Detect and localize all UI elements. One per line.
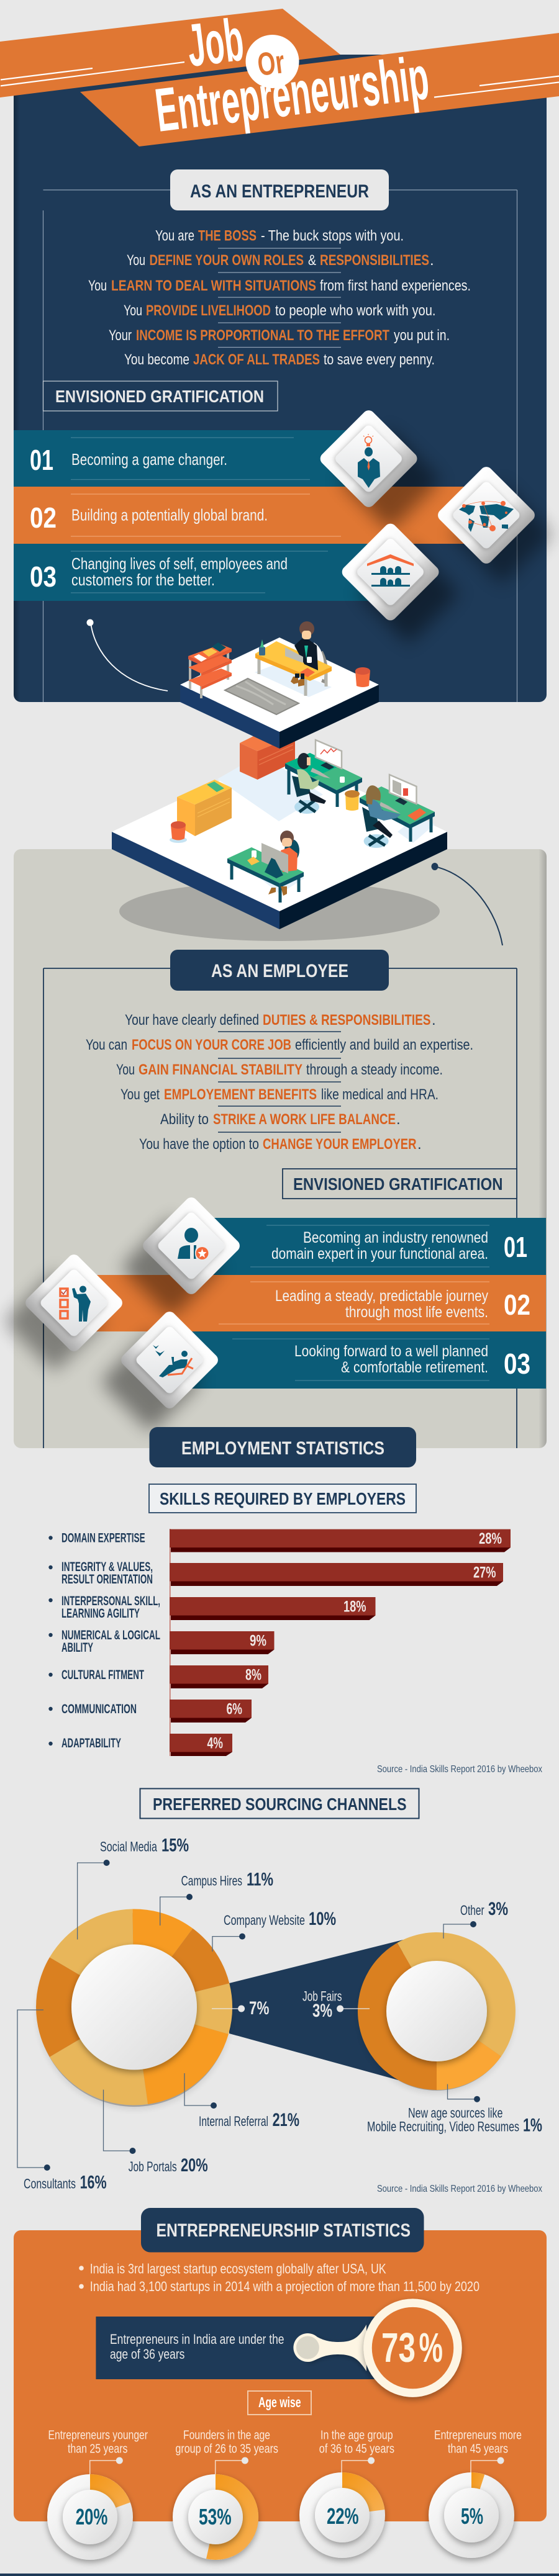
label: social media 15%: 15% <box>161 1835 189 1856</box>
label: campus hires 11%: Campus Hires <box>181 1873 242 1888</box>
label: 26 to 35: group of 26 to 35 years <box>175 2442 278 2456</box>
title banner <box>0 6 559 146</box>
text block: employee traits: . <box>432 1012 436 1029</box>
bar: domain expertise 28% <box>170 1529 511 1552</box>
text block: employee traits: GAIN FINANCIAL STABILITY <box>139 1061 302 1078</box>
label: 7%: 7% <box>249 1998 269 2019</box>
text block: employee traits: . <box>417 1136 422 1153</box>
band 01: domain expert <box>199 1218 546 1275</box>
heading: as an employee: AS AN EMPLOYEE <box>211 961 348 981</box>
text block: entrepreneur traits: you put in. <box>394 327 450 344</box>
band 03: changing lives: 03 <box>30 561 57 593</box>
band 03: retirement <box>180 1331 546 1389</box>
text block: employee traits: STRIKE A WORK LIFE BALANCE <box>213 1111 396 1128</box>
band 02: steady journey: 02 <box>504 1289 530 1321</box>
band 01: game changer <box>14 430 349 487</box>
subheading: PREFERRED SOURCING CHANNELS <box>153 1795 406 1814</box>
legend labels <box>48 1531 160 1750</box>
title badge: Or <box>246 35 299 88</box>
label: other 3%: Other <box>460 1903 484 1918</box>
subheading: envisioned gratification: ENVISIONED GRATIFICATION <box>293 1174 503 1194</box>
rug <box>225 678 299 714</box>
panel: as an employee <box>4 849 547 1448</box>
bar: adaptability 4% <box>170 1734 232 1756</box>
bar: communication 6%: 6% <box>226 1701 242 1718</box>
subheading <box>140 1789 419 1819</box>
panel: entrepreneurship statistics <box>14 2208 547 2560</box>
heading: employment statistics <box>149 1427 416 1467</box>
legend labels: COMMUNICATION <box>61 1702 137 1716</box>
band 01: game changer: Becoming a game changer. <box>71 450 227 469</box>
label: job fairs 3% <box>302 1989 370 2021</box>
text block: entrepreneur traits: INCOME IS PROPORTIONAL TO THE EFFORT <box>136 327 389 344</box>
bar: cultural 8%: 8% <box>245 1666 261 1683</box>
bar: domain expertise 28%: 28% <box>479 1530 502 1547</box>
bar: integrity 27% <box>170 1563 503 1586</box>
subheading: age wise <box>248 2391 311 2415</box>
text block: entrepreneur traits: PROVIDE LIVELIHOOD <box>146 302 271 319</box>
label: 7% <box>212 1998 269 2019</box>
donut: 20 percent: 20% <box>76 2504 107 2529</box>
label: campus hires 11%: 11% <box>247 1870 273 1889</box>
title badge: Or: Or <box>255 44 286 83</box>
text block: entrepreneur traits: - The buck stops with you. <box>261 227 404 245</box>
donut: 5 percent: 5% <box>461 2503 483 2529</box>
text block: employee traits: EMPLOYEMENT BENEFITS <box>164 1086 317 1103</box>
donut: 53 percent <box>173 2457 258 2560</box>
label: job portals 20%: Job Portals <box>129 2159 177 2174</box>
label: other 3%: 3% <box>488 1899 508 1919</box>
bar: communication 6% <box>170 1700 252 1723</box>
band 03: retirement: Looking forward to a well planned <box>294 1343 488 1360</box>
label: consultants 16% <box>24 2173 107 2192</box>
label: company website 10%: 10% <box>309 1909 336 1929</box>
text block: entrepreneur traits: You <box>127 252 145 269</box>
text block: employee traits: DUTIES & RESPONSIBILITIES <box>263 1012 431 1029</box>
label: social media 15%: Social Media <box>100 1839 158 1855</box>
text block: entrepreneur traits <box>88 227 471 368</box>
text block: employee traits: You have the option to <box>139 1136 259 1153</box>
donut: 22 percent <box>299 2457 385 2558</box>
shelf <box>188 642 232 698</box>
donut: 20 percent <box>47 2457 133 2560</box>
legend labels: RESULT ORIENTATION <box>61 1572 153 1587</box>
text block: entrepreneur traits: You become <box>124 351 189 368</box>
legend labels: INTEGRITY & VALUES, <box>61 1560 153 1574</box>
isometric office illustration <box>112 621 447 929</box>
callout: 73 percent: age of 36 years <box>110 2346 184 2362</box>
label: new age sources 1% <box>367 2105 542 2135</box>
text block: entrepreneur traits: You <box>88 277 107 294</box>
orange bin <box>355 667 370 687</box>
legend labels: ABILITY <box>61 1641 93 1655</box>
legend labels: DOMAIN EXPERTISE <box>61 1531 145 1546</box>
band 02: steady journey <box>81 1275 546 1331</box>
label: internal referral 21%: Internal Referral <box>199 2114 268 2129</box>
yellow cabinet <box>177 780 232 836</box>
ribbon: lower band <box>80 33 559 146</box>
icon: world map diamond <box>435 464 553 585</box>
text block: entrepreneur traits: . <box>430 252 434 269</box>
icon: checklist diamond <box>4 1252 125 1372</box>
band 01: game changer: 01 <box>30 444 53 476</box>
icon: retirement diamond <box>100 1309 220 1433</box>
band 03: changing lives: Changing lives of self, employees and <box>71 554 288 573</box>
heading: as an employee <box>170 950 389 991</box>
band 01: domain expert: Becoming an industry renowned <box>303 1229 488 1246</box>
bar: adaptability 4%: 4% <box>207 1734 223 1752</box>
label: consultants 16%: 16% <box>80 2173 107 2192</box>
text block: entrepreneur traits: You are <box>155 227 194 245</box>
legend labels: LEARNING AGILITY <box>61 1606 140 1621</box>
heading <box>141 2208 424 2252</box>
yellow bin <box>345 790 360 811</box>
text block: employee traits: You can <box>86 1037 127 1053</box>
label: younger than 25: than 25 years <box>68 2442 128 2456</box>
donut: job fairs breakdown <box>358 1932 516 2091</box>
bar: interpersonal 18%: 18% <box>343 1598 366 1615</box>
text block: entrepreneur traits: You <box>124 302 142 319</box>
band 02: steady journey: Leading a steady, predictable journey <box>275 1287 488 1305</box>
label: 26 to 35 <box>175 2428 278 2456</box>
label: more than 45 <box>434 2428 522 2456</box>
text block: entrepreneur traits: LEARN TO DEAL WITH SITUATIONS <box>111 277 316 294</box>
connector curve <box>87 619 168 691</box>
band 03: retirement: 03 <box>504 1348 530 1380</box>
icon: team under roof diamond <box>340 521 460 644</box>
donut: 53 percent: 53% <box>199 2504 232 2529</box>
bullet list: India is 3rd largest startup ecosystem globally after USA, UK <box>90 2261 386 2277</box>
text block: employee traits: efficiently and build an expertise. <box>295 1037 473 1053</box>
label: job portals 20% <box>129 2155 208 2176</box>
text block: employee traits: You get <box>120 1086 160 1103</box>
floor shadow <box>119 881 440 941</box>
text block: entrepreneur traits: Your <box>109 327 132 344</box>
text block: entrepreneur traits: to people who work with you. <box>275 302 436 319</box>
subheading <box>149 1484 416 1513</box>
text block: employee traits: CHANGE YOUR EMPLOYER <box>263 1136 416 1153</box>
orange cabinet <box>240 729 295 780</box>
label: consultants 16%: Consultants <box>24 2176 76 2191</box>
footer strip <box>0 2574 559 2576</box>
employee at monitor, front desk <box>227 831 304 903</box>
label: 36 to 45 <box>319 2428 394 2456</box>
waste bin <box>170 821 187 843</box>
label: social media 15% <box>100 1835 189 1856</box>
connector curve <box>431 863 502 945</box>
donut: main channels <box>36 1909 232 2107</box>
label: younger than 25: Entrepreneurs younger <box>48 2428 148 2442</box>
panel: as an entrepreneur <box>14 55 553 702</box>
subheading: SKILLS REQUIRED BY EMPLOYERS <box>160 1489 406 1508</box>
text block: employee traits <box>86 1012 473 1153</box>
label: more than 45: Entrepreneurs more <box>434 2428 522 2442</box>
band 02: global brand <box>14 487 467 544</box>
subheading: envisioned gratification: ENVISIONED GRATIFICATION <box>55 387 264 406</box>
bullet list <box>79 2261 479 2294</box>
text block: employee traits: Your have clearly defined <box>125 1012 259 1029</box>
label: new age sources 1%: New age sources like <box>408 2105 502 2121</box>
band 03: changing lives: customers for the better. <box>71 570 215 589</box>
entrepreneur at desk <box>255 621 332 696</box>
icon: domain expert diamond <box>120 1195 242 1318</box>
text block: entrepreneur traits: to save every penny. <box>324 351 435 368</box>
leader lines <box>17 1863 477 2168</box>
band 03: retirement: & comfortable retirement. <box>341 1359 488 1376</box>
bar: cultural 8% <box>170 1665 268 1688</box>
label: 36 to 45: In the age group <box>320 2428 393 2442</box>
title word: Job: Job <box>183 6 247 79</box>
text block: entrepreneur traits: from first hand experiences. <box>320 277 471 294</box>
text block: entrepreneur traits: & <box>308 252 316 269</box>
callout: 73 percent: Entrepreneurs in India are under the <box>110 2331 284 2347</box>
text block: employee traits: through a steady income. <box>306 1061 443 1078</box>
text block: entrepreneur traits: DEFINE YOUR OWN ROLES <box>149 252 304 269</box>
lower platform: employees <box>112 729 447 929</box>
label: other 3% <box>460 1899 508 1919</box>
callout: 73 percent: 73 <box>381 2325 416 2371</box>
label: younger than 25 <box>48 2428 148 2456</box>
band 02: global brand: Building a potentially global brand. <box>71 505 268 524</box>
label: 26 to 35: Founders in the age <box>183 2428 270 2442</box>
legend labels: NUMERICAL & LOGICAL <box>61 1628 160 1642</box>
ribbon: upper band <box>0 9 340 97</box>
upper platform: entrepreneur <box>180 621 379 749</box>
connecting wedge <box>229 1940 403 2080</box>
text block: entrepreneur traits: THE BOSS <box>198 227 257 245</box>
band 01: domain expert: 01 <box>504 1231 527 1263</box>
text block: entrepreneur traits: RESPONSIBILITIES <box>320 252 429 269</box>
label: more than 45: than 45 years <box>448 2442 508 2456</box>
chart: preferred sourcing channels <box>17 1789 542 2194</box>
label: internal referral 21%: 21% <box>273 2110 299 2130</box>
heading: employment statistics: EMPLOYMENT STATISTICS <box>181 1438 384 1459</box>
callout: 73 percent <box>96 2303 458 2393</box>
label: job fairs 3%: Job Fairs <box>302 1989 342 2004</box>
heading: as an entrepreneur <box>170 169 389 210</box>
label: 36 to 45: of 36 to 45 years <box>319 2442 394 2456</box>
donut: 22 percent: 22% <box>327 2503 359 2529</box>
bar: numerical 9% <box>170 1631 275 1654</box>
text block: employee traits: . <box>396 1111 401 1128</box>
label: company website 10%: Company Website <box>224 1912 305 1928</box>
band 01: domain expert: domain expert in your functional area. <box>271 1245 488 1263</box>
legend labels: CULTURAL FITMENT <box>61 1668 144 1682</box>
heading: ENTREPRENEURSHIP STATISTICS <box>157 2220 411 2241</box>
legend labels: INTERPERSONAL SKILL, <box>61 1594 160 1608</box>
chart: skills required by employers <box>48 1484 542 1775</box>
label: job portals 20%: 20% <box>181 2155 208 2176</box>
icon: leader diamond <box>318 408 441 531</box>
bar: integrity 27%: 27% <box>473 1564 496 1582</box>
legend labels: ADAPTABILITY <box>61 1736 121 1750</box>
bar: interpersonal 18% <box>170 1597 375 1620</box>
text block: employee traits: like medical and HRA. <box>321 1086 439 1103</box>
label: new age sources 1%: 1% <box>523 2115 542 2135</box>
employee at monitor, desk one <box>285 740 362 814</box>
text block: entrepreneur traits: JACK OF ALL TRADES <box>193 351 320 368</box>
subheading: envisioned gratification <box>283 1169 517 1199</box>
donut: 5 percent <box>429 2457 514 2558</box>
bar: numerical 9%: 9% <box>250 1633 266 1650</box>
band 02: steady journey: through most life events. <box>345 1304 488 1321</box>
bullet list: India had 3,100 startups in 2014 with a projection of more than 11,500 by 2020 <box>90 2279 479 2294</box>
text block: employee traits: Ability to <box>160 1111 209 1128</box>
callout: 73 percent: % <box>419 2325 443 2371</box>
subheading: envisioned gratification <box>43 381 278 411</box>
text block: employee traits: You <box>116 1061 135 1078</box>
label: job fairs 3%: 3% <box>312 2001 332 2021</box>
employee at monitor, desk two <box>360 775 435 848</box>
text block: employee traits: FOCUS ON YOUR CORE JOB <box>132 1037 291 1053</box>
band 03: changing lives <box>14 544 380 601</box>
band 02: global brand: 02 <box>30 502 57 534</box>
heading: as an entrepreneur: AS AN ENTREPRENEUR <box>190 181 369 202</box>
subheading: age wise: Age wise <box>258 2394 301 2410</box>
